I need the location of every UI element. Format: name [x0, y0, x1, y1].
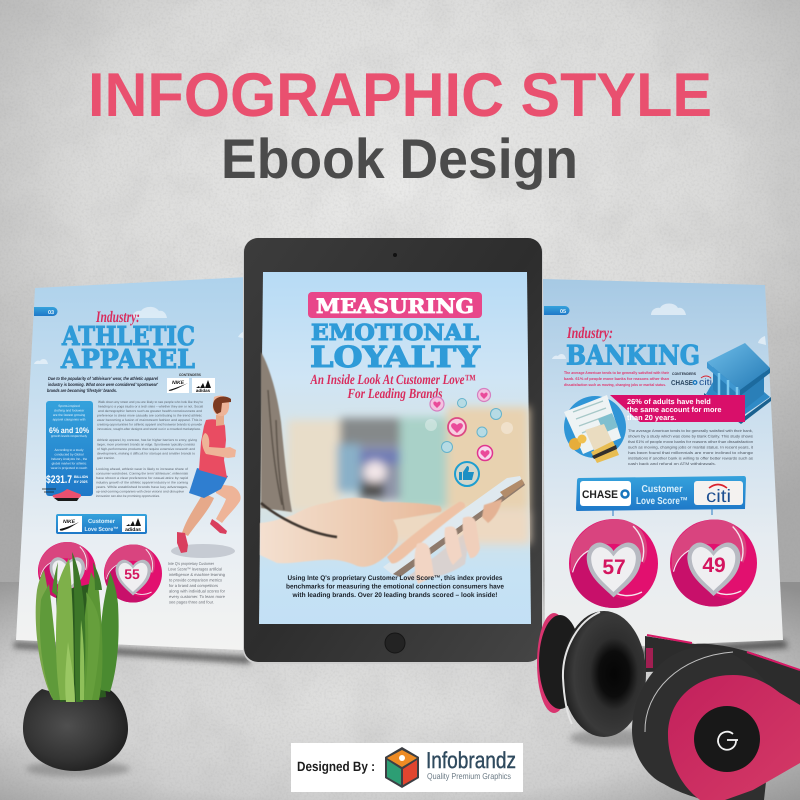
body copy: institutions if another bank is willing to offer better rewards such as	[628, 456, 753, 460]
illustration: runner	[171, 396, 241, 558]
body copy: and demographic factors such as greater health consciousness and	[98, 409, 202, 413]
score circle: chase 57: 57	[602, 556, 626, 579]
heading: industry: Industry:	[95, 309, 140, 326]
proprietary score note	[168, 561, 226, 604]
customer love banner: Love Score™	[84, 526, 118, 533]
stats callout: According to a study	[55, 448, 84, 452]
panel: left ebook page, athletic apparel	[16, 277, 248, 650]
heading: banking: BANKING	[566, 340, 700, 372]
intro text in pink: dissatisfaction such as moving, changing jobs or marital status.	[564, 383, 666, 387]
proprietary score note: Love Score™ leverages artificial	[168, 566, 222, 572]
body copy: of high-performance products that require extensive research and	[97, 447, 195, 451]
page cloud decoration	[552, 304, 766, 359]
cover subtitle	[310, 373, 476, 402]
stats callout: BY 2025	[74, 480, 88, 484]
stats callout: apparel categories with	[53, 418, 86, 422]
tablet screen cover	[259, 272, 531, 624]
illustration: banking documents circle	[564, 395, 626, 463]
body copy: has been found that millennials are more inclined to change	[628, 451, 753, 455]
icon: pink headphones	[537, 611, 800, 800]
proprietary score note: to provide comparison metrics	[169, 578, 222, 582]
cover heading: emotional loyalty	[310, 320, 480, 374]
intro text in pink: bank. 61% of people move banks for reasons other than	[564, 377, 670, 381]
cover photo: hair strand	[261, 503, 337, 537]
customer love banner: Love Score™	[636, 496, 688, 507]
body copy: shown by a study which was done by Bank Clarity. This study shows	[628, 434, 753, 438]
proprietary score note: see pages three and four.	[169, 600, 214, 604]
body copy: gain traction.	[97, 456, 115, 460]
body copy	[96, 400, 203, 498]
stats callout: $231.7	[46, 474, 72, 486]
body copy: creating opportunities for athletic apparel and footwear brands to provide	[97, 422, 202, 426]
proprietary score note: intelligence & machine learning	[169, 572, 226, 577]
intro text	[47, 376, 159, 393]
panel: right ebook page, banking	[543, 279, 783, 650]
background: concrete wall	[0, 0, 800, 584]
cover description: Using Inte Q's proprietary Customer Love Score™, this index provides	[288, 575, 503, 582]
score circle: nike	[38, 542, 96, 600]
cover heading: measuring: MEASURING	[316, 294, 474, 318]
body copy: larger, more prominent brands an edge. Sportswear typically consists	[97, 442, 195, 446]
customer love banner	[56, 514, 147, 534]
body copy: that 61% of people move banks for reasons other than dissatisfaction	[628, 440, 753, 444]
page number tab: 05	[560, 309, 566, 315]
credit label: Designed By :	[297, 759, 375, 774]
left ear cushion	[562, 611, 646, 737]
page number tab: 03	[48, 310, 54, 316]
body copy: heading to a yoga studio or a tech sites – whether they are or not. Social	[98, 404, 203, 408]
brand name	[426, 747, 516, 781]
cover photo: phone	[383, 476, 525, 577]
cover heading: emotional loyalty: EMOTIONAL	[311, 320, 479, 346]
left ear cup outer	[537, 613, 571, 713]
body copy: years. While established brands have key advantages,	[96, 485, 188, 489]
tablet device	[243, 238, 543, 664]
body copy: The average American tends to be generally satisfied with their bank,	[628, 429, 753, 433]
subtitle: Ebook Design	[221, 127, 578, 190]
body copy: wear becoming a fusion of mainstream fashion and apparel. This is	[97, 418, 202, 422]
proprietary score note: for a brand and competitors	[169, 583, 218, 588]
cover heading: emotional loyalty: LOYALTY	[310, 340, 480, 374]
body copy: cash back and refund on ATM withdrawals.	[628, 462, 716, 466]
credit badge	[291, 743, 523, 792]
proprietary score note: every customer. To learn more	[169, 594, 226, 599]
customer love banner	[576, 476, 746, 511]
score circle: adidas 55: 55	[124, 566, 140, 582]
customer love banner: adidas	[125, 527, 141, 533]
body copy: consumer wardrobes. Coining the term 'athleisure', millennials	[96, 472, 188, 476]
stats callout: conducted by Global	[54, 452, 84, 456]
intro text: brands are becoming 'lifestyle' brands.	[47, 388, 117, 393]
stats callout: are the fastest growing	[53, 413, 85, 417]
intro text in pink	[564, 371, 670, 387]
intro text: Due to the popularity of 'athleisure' wear, the athletic apparel	[48, 376, 159, 381]
intro text: industry is booming. What once were considered 'sportswear'	[48, 382, 159, 387]
body copy: such as moving, changing jobs or marital status. In recent years, it	[628, 446, 753, 450]
right ear cup	[632, 647, 800, 800]
heading: athletic apparel: ATHLETIC	[61, 322, 195, 352]
body copy: innovative, sought-after designs and stand out in a crowded marketplace.	[97, 427, 201, 431]
customer love banner: NIKE	[63, 519, 76, 525]
score circle: citi 49	[670, 509, 757, 606]
contenders logos: citi	[699, 377, 712, 387]
pink stat banner	[610, 395, 745, 422]
cover photo: hands	[260, 498, 502, 584]
cover photo: blurred background	[288, 407, 530, 544]
power button	[694, 706, 760, 772]
stats callout: wear is projected to reach	[51, 466, 87, 470]
body copy: up-and-coming companies with clear visions and disruptive	[96, 490, 184, 494]
stats callout: Sports-inspired	[58, 404, 80, 408]
body copy: Looking ahead, athletic wear is likely to increase share of	[96, 467, 188, 471]
contenders logos: CONTENDERS	[179, 373, 202, 377]
body copy: Athletic apparel, by contrast, has far higher barriers to entry, giving	[97, 438, 197, 442]
score circle: chase 57	[569, 510, 658, 608]
intro text in pink: The average American tends to be generally satisfied with their	[564, 371, 669, 375]
stats callout: 6% and 10%	[49, 426, 89, 435]
body copy: preference to dress more casually are contributing to the trend athletic	[97, 414, 202, 418]
background: concrete floor	[0, 582, 800, 800]
heading: industry: Industry:	[566, 325, 613, 342]
score circle: citi 49: 49	[702, 554, 726, 577]
page cloud decoration	[34, 307, 248, 364]
stats callout: global market for athletic	[52, 462, 87, 466]
contenders logos	[167, 373, 215, 393]
body copy: Walk down any street and you are likely to see people who look like they're	[98, 400, 203, 404]
ebook shadow	[14, 640, 788, 664]
body copy: industry growth of the athletic apparel industry in the coming	[96, 480, 188, 484]
plant leaves	[36, 552, 119, 702]
body copy	[628, 429, 753, 466]
customer love banner: citi	[706, 486, 731, 506]
tablet camera	[393, 253, 397, 257]
score circle: adidas 55	[104, 544, 162, 602]
stats callout: clothing and footwear	[54, 408, 85, 412]
page number tab	[34, 307, 58, 316]
pink stat banner: the same account for more	[627, 405, 721, 414]
social reaction icons	[425, 388, 513, 486]
heading: athletic apparel: APPAREL	[60, 345, 195, 375]
heading: athletic apparel	[60, 322, 195, 375]
contenders logos: NIKE	[172, 380, 185, 386]
proprietary score note: Inte Q's proprietary Customer	[168, 561, 215, 566]
stats callout	[46, 401, 93, 496]
pink stat banner: 26% of adults have held	[627, 397, 711, 406]
contenders logos: CONTENDERS	[672, 372, 697, 376]
contenders logos: CHASE	[671, 380, 693, 387]
icon: plant in pot	[23, 552, 130, 777]
customer love banner: Customer	[88, 518, 116, 525]
cover subtitle: For Leading Brands	[347, 387, 443, 402]
pot	[23, 689, 128, 771]
cover description	[286, 575, 504, 599]
body copy: development, making it difficult for startups and smaller brands to	[97, 452, 195, 456]
icon: power symbol	[718, 732, 738, 750]
icon: running shoe	[42, 489, 81, 501]
body copy: have shown a clear preference for casual attire by rapid	[96, 476, 188, 480]
headband	[645, 636, 800, 710]
page number tab	[544, 306, 570, 315]
stats callout: Industry Analysts Inc., the	[51, 457, 87, 461]
stats callout: growth levels respectively	[51, 434, 88, 438]
tablet home button	[385, 633, 405, 653]
brand name: Infobrandz	[426, 747, 516, 773]
customer love banner: Customer	[642, 484, 683, 495]
contenders logos	[671, 372, 712, 387]
cover subtitle: An Inside Look At Customer Love™	[310, 373, 476, 388]
icon: bank building	[704, 343, 771, 424]
customer love banner: CHASE	[582, 489, 618, 501]
cover description: benchmarks for measuring the emotional connection consumers have	[286, 584, 504, 590]
body copy: innovation can also be promising opportunities.	[96, 494, 160, 498]
cover description: with leading brands. Over 20 leading brands scored – look inside!	[292, 592, 498, 599]
title: INFOGRAPHIC STYLE	[88, 61, 712, 130]
brand name: Quality Premium Graphics	[427, 771, 511, 781]
stats callout: BILLION	[74, 475, 88, 479]
icon: infobrandz hexagon logo	[385, 747, 419, 788]
pink stat banner: than 20 years.	[627, 413, 676, 422]
contenders logos: adidas	[196, 388, 211, 393]
proprietary score note: along with individual scores for	[169, 588, 226, 594]
cover photo: hair	[261, 352, 292, 512]
